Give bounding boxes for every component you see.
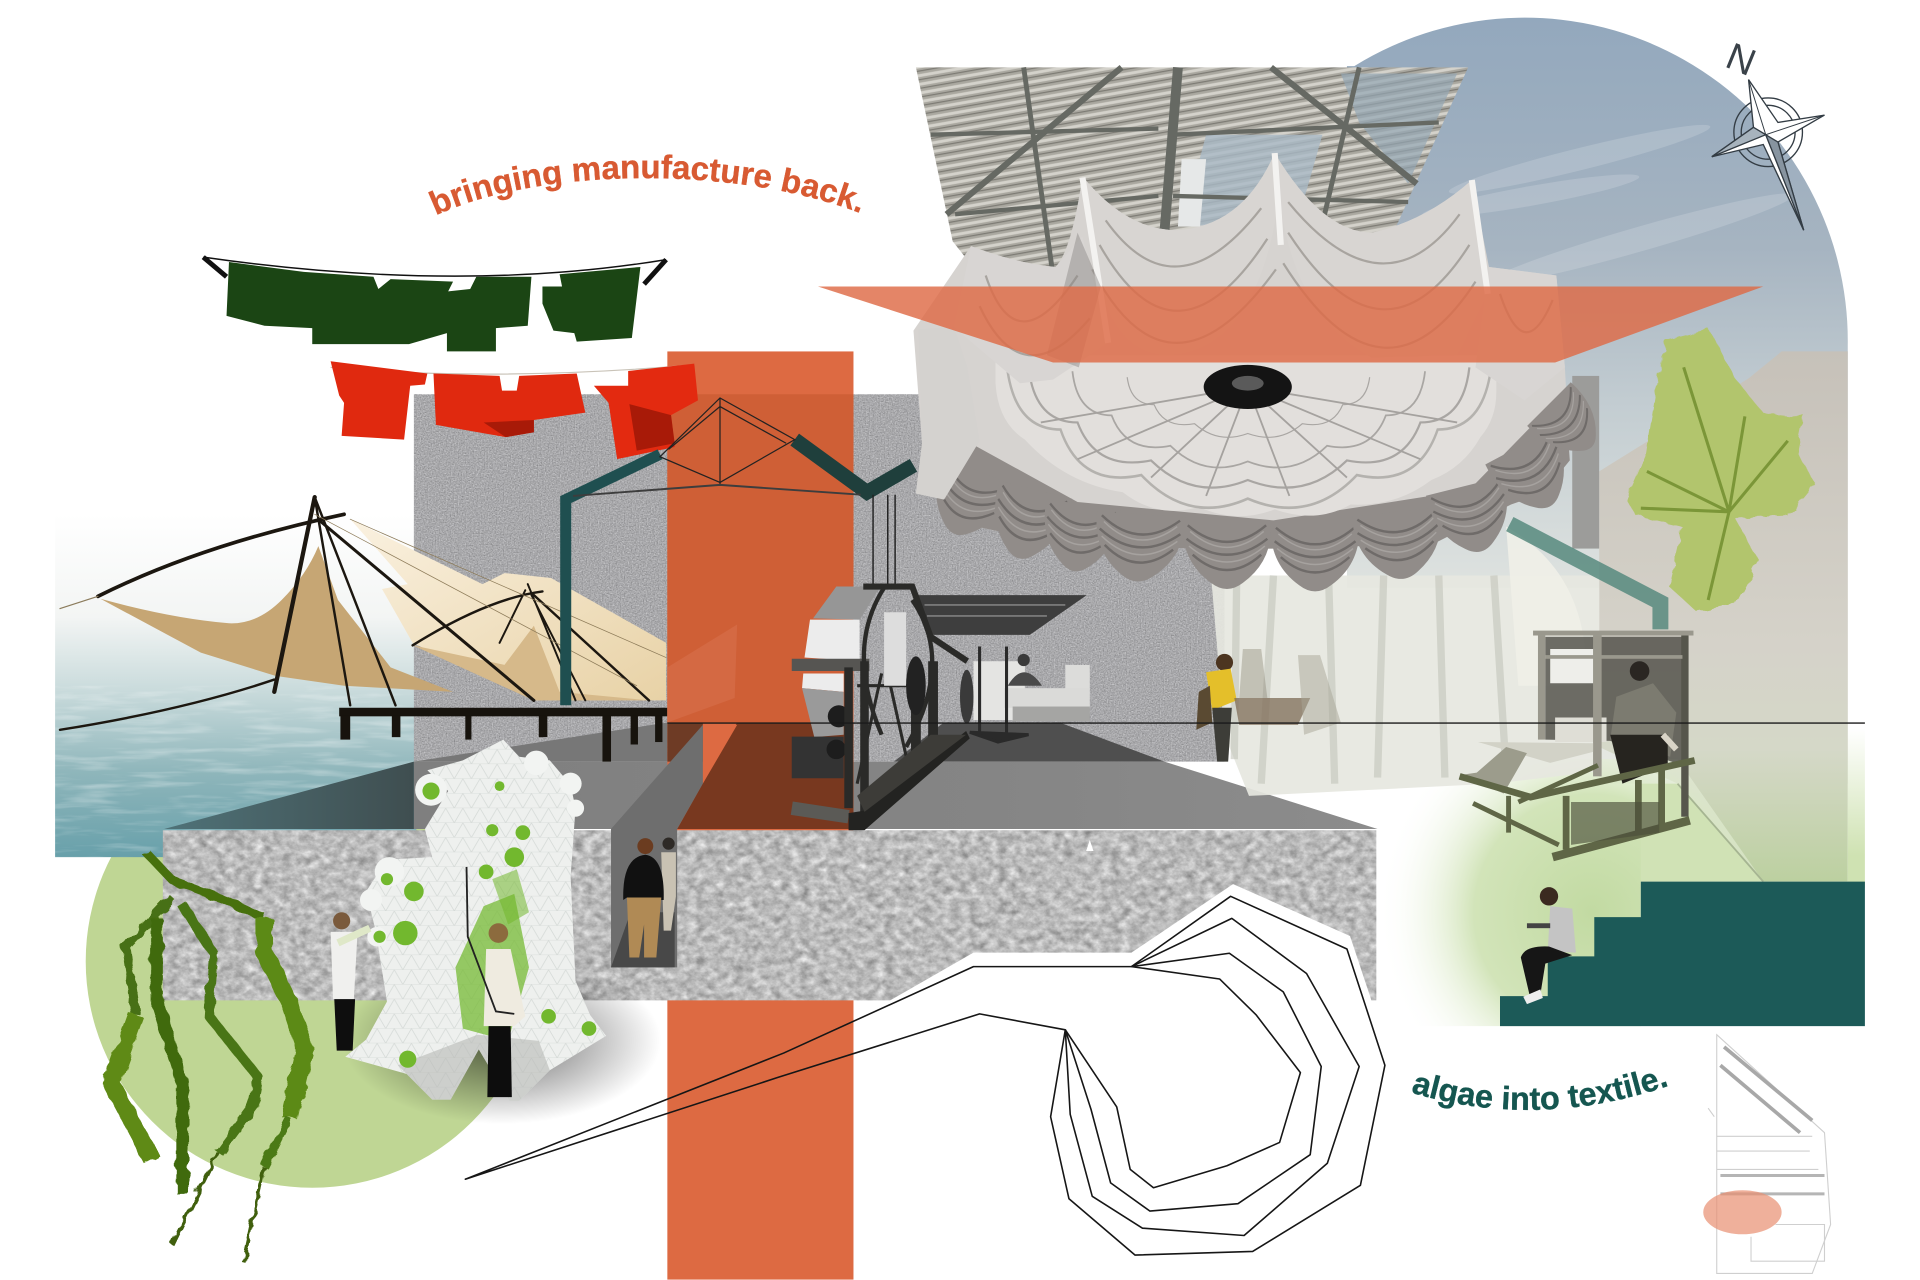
green gradient ground at right [1384,729,1865,1026]
sea photo [55,514,416,857]
teal frame right [1510,524,1660,629]
upper swag: centre right [1275,153,1488,358]
silhouette [913,153,1570,549]
left drape tail [916,327,980,500]
woman in white coat [467,867,525,1097]
algae honeycomb pod [331,740,606,1101]
orange wedge [818,287,1763,362]
teal stairs [1500,882,1865,1026]
woven cloth [1555,718,1607,742]
tan net small [413,626,649,700]
swag shadows [1047,233,1101,367]
white floor chip [1086,840,1093,851]
green seaweed leaf [1626,329,1815,611]
drape canopy [913,153,1614,591]
pier [339,708,667,762]
rosette [1204,365,1292,409]
fishing nets [60,497,667,762]
curtain [1211,527,1599,796]
net reflection and dark floor on column [667,394,853,829]
laundry: green garments [203,257,666,351]
loom column [873,495,895,588]
yarn drum [802,620,860,692]
upper swag: left [954,236,1108,383]
small wheel [960,670,973,724]
machine base [849,731,970,830]
weaver [1610,661,1676,784]
heading: algae into textile [1412,1071,1668,1110]
pale net [350,519,666,700]
jacquard white panel [1550,649,1594,683]
spiral line drawing [465,896,1385,1255]
pod bubbles [360,751,584,947]
machine frame [792,587,967,817]
pod green algae spots [373,781,596,1068]
sky clouds [1420,116,1797,294]
heading: bringing manufacture back: bringing manufacture back. [428,154,860,215]
pod base shading [398,1035,550,1101]
site plan [1703,1035,1831,1273]
outer grey scallops [919,382,1614,591]
green circle behind kelp [86,735,539,1188]
orange column [667,351,853,1280]
compass north letter: N [1720,36,1761,85]
dining figures behind curtain [1196,649,1341,762]
loom table and warp [1478,742,1593,763]
concrete courtyard wall [1572,351,1848,882]
laundry: red garments [331,361,698,459]
corridor niche with walkers [611,725,1093,967]
man in lab coat [331,912,370,1051]
upper swag: centre left [1082,153,1281,355]
central spinning machine [792,587,1090,830]
location ellipse [1703,1190,1782,1234]
spools and roller [973,661,1090,721]
upper swag: right [1476,267,1565,400]
sky arch [1347,18,1848,784]
light wheel inner [884,612,906,686]
perspective floor [164,722,1378,829]
loom interior [1545,637,1682,765]
skylight roof photo [916,67,1468,276]
loom posts [1533,631,1693,817]
swag fold lines [980,202,1553,355]
grey lower band [944,392,1570,549]
poles and ropes [60,497,666,730]
hopper funnel [917,595,1087,635]
gears and rollers [792,737,844,778]
truss [573,398,861,496]
ruffled disc [996,355,1496,516]
loom base [1460,760,1695,857]
concrete slab [163,830,1376,1000]
stand [970,647,1029,742]
grey grain building block [414,394,1224,762]
factory frame in teal [566,398,913,705]
disc gathers [1007,363,1492,508]
heading: algae into textile: algae into textile. [1412,1071,1668,1110]
kelp seaweed [111,853,305,1262]
swag highlights [1082,153,1488,343]
horizon line [667,722,1865,724]
tan net large [100,546,453,692]
algae pod shadow [343,958,661,1124]
person: walker [623,838,664,958]
seated man sketching [1521,887,1576,1004]
machine operator [1008,654,1042,686]
person: second walker [661,838,676,931]
right loom with weaver [1460,631,1695,857]
compass rose [1712,36,1824,230]
